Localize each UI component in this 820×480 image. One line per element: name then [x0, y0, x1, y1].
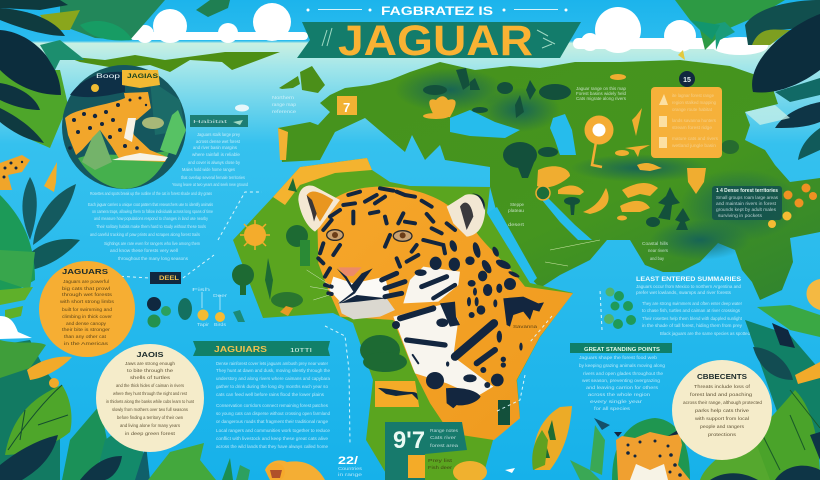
small orange deer [280, 306, 293, 316]
orange info card: region stalked mapping [672, 100, 716, 105]
teal tag: Habitat [193, 119, 229, 124]
cream circle panel: and the thick hides of caiman in rivers [116, 383, 185, 388]
title small heading [306, 4, 568, 18]
bird icon [235, 104, 249, 112]
asia text block: Forest basins widely held [576, 91, 626, 96]
mid left text block: throughout the many long seasons [118, 256, 189, 261]
bottom panel 9/7 [385, 422, 467, 480]
diet icons [147, 287, 245, 328]
left leaves [0, 177, 80, 320]
mid left text block: Sightings are rare even for rangers who live among them [104, 241, 200, 246]
middle east text: desert [508, 222, 525, 227]
ribbon text block: conflict with livestock and keep these great cats alive [216, 436, 328, 441]
europe badge [337, 96, 357, 115]
ribbon text block [216, 361, 330, 449]
dark asia callout: Small groups roam large areas [716, 195, 779, 200]
small map text: reference [272, 109, 297, 114]
small fish [594, 418, 610, 430]
middle ocean text block: and leaving carrion for others [586, 385, 659, 390]
deel tag [150, 272, 181, 284]
bottom right foliage [700, 305, 820, 480]
bottom left foliage [0, 340, 250, 480]
jaguar stripes [318, 188, 495, 363]
orange circle panel: through wet forests [62, 292, 113, 297]
circular scene: jaguar: JAGIAS [127, 74, 158, 80]
right ear rim [472, 193, 485, 210]
cream circle panel: to bite through the [127, 368, 174, 373]
orange info card: 15 [683, 77, 691, 84]
orange circle panel [39, 261, 135, 357]
cream circle panel: in thickets along the banks while cubs learn to hunt [106, 399, 195, 404]
indian ocean text block [636, 277, 750, 336]
india text: and bay [650, 256, 665, 261]
mid left text block: and measure how populations respond to changes in land use nearby [94, 216, 209, 221]
diet icons: Tapir [197, 322, 210, 327]
small left jaguar [0, 155, 30, 190]
top left foliage [0, 0, 165, 143]
ribbon text block: gather to drink during the long dry months each year so [216, 384, 328, 389]
central asia trees [423, 68, 571, 178]
indian ocean text block: LEAST ENTERED SUMMARIES [636, 277, 741, 283]
circular scene: jaguar: Boop [96, 74, 121, 80]
green below muzzle [413, 370, 450, 433]
dark asia callout: and maintain rivers in forest [716, 201, 777, 206]
ribbon text block: Conservation corridors connect remaining forest patches [216, 403, 329, 408]
cream circle right: Threats include loss of [694, 384, 751, 389]
top left text block: Young leave at two years and seek new ground [172, 182, 248, 187]
middle ocean text block: wet season, preventing overgrazing [582, 378, 660, 383]
left small cloud [0, 316, 32, 339]
top left text block: where rainfall is reliable [192, 152, 240, 157]
top left text block: that overlap several female territories [181, 175, 246, 180]
mid left text block: Rosettes and spots break up the outline of the cat in forest shade and dry grass [90, 191, 213, 196]
title small heading: FAGBRATEZ IS [381, 4, 493, 18]
dotted route lines [115, 192, 602, 445]
middle ocean text block: every single year [590, 399, 643, 404]
orange circle panel: and dense canopy [66, 321, 107, 326]
top left text block: Jaguars stalk large prey [197, 132, 241, 137]
left ear shadow [307, 195, 317, 222]
cream circle panel: slowly from mothers over two full seasons [112, 407, 189, 412]
title ribbon: JAGUAR [338, 17, 533, 65]
orange fruits [768, 184, 817, 228]
whiskers [307, 270, 330, 300]
left cloud [130, 3, 308, 43]
africa yellow coast [273, 158, 372, 205]
land: europe and asia [278, 60, 820, 300]
bottom panel 9/7: Fish deer [428, 465, 453, 470]
deel tag: DEEL [159, 276, 179, 282]
bottom orange bear [265, 460, 325, 480]
africa bottom yellow [453, 461, 487, 480]
white muzzle [329, 277, 390, 308]
sun icon [240, 220, 270, 250]
middle ribbon: GREAT STANDING POINTS [584, 347, 660, 353]
golden map icons [423, 74, 706, 220]
top right foliage [675, 0, 820, 160]
orange circle panel: JAGUARS [62, 269, 108, 276]
small map text: Northern [272, 95, 295, 100]
jaguar fur [317, 187, 573, 440]
left ear inner [307, 191, 333, 222]
indian ocean text block: prefer wet lowlands, swamps and river forests [636, 290, 732, 295]
cream circle right: protections [708, 432, 737, 437]
orange fish [27, 357, 72, 380]
middle east text: Steppe [510, 202, 524, 207]
orange circle panel: built for swimming and [62, 307, 113, 312]
jaguar head and body [298, 185, 573, 440]
orange info card [651, 71, 722, 158]
orange info card: mature cats and rivers [672, 136, 719, 141]
small map text: range map [272, 102, 296, 107]
right cloud [573, 7, 768, 55]
ribbon text block: or dangerous roads that fragment their traditional range [216, 419, 328, 424]
india text: near rivers [648, 248, 669, 253]
cream circle right: with support from local [695, 416, 749, 421]
portrait green backdrop [612, 418, 690, 480]
top left text block: and cover is always close by [188, 160, 241, 165]
indian ocean text block: They are strong swimmers and often enter deep water [642, 301, 742, 306]
scene jaguar [65, 92, 167, 162]
asia text block [576, 86, 627, 101]
middle ocean text block: across the whole region [588, 392, 651, 397]
asia text block: Jaguar range on this map [576, 86, 626, 91]
top left text block: Males hold wide home ranges [182, 167, 236, 172]
top left text block: across dense wet forest [196, 139, 241, 144]
small map text [272, 95, 297, 114]
cream circle panel: shells of turtles [130, 375, 171, 380]
bottom panel 9/7: forest area [430, 443, 459, 448]
top left text block [172, 132, 248, 187]
diet icons: Birds [214, 322, 227, 327]
dark asia callout: 1 4 Dense forest territories [716, 188, 778, 194]
cream circle right: forest land and poaching [690, 392, 753, 397]
jaguar markings [337, 239, 544, 408]
middle east text: plateau [508, 208, 524, 213]
small orange bird [49, 378, 59, 388]
orange bird right [795, 362, 820, 384]
africa land [233, 158, 573, 480]
indian ocean text block: in the shade of tall forest, hiding them from prey [642, 323, 743, 328]
ribbon text block: across the wild lands that they have always called home [216, 444, 328, 449]
dark asia callout: surviving in pockets [718, 213, 763, 218]
asia text block: Cats migrate along rivers [576, 96, 627, 101]
east africa label: Savanna [513, 324, 538, 329]
lizard panel [375, 381, 420, 407]
indian ocean text block: Black jaguars are the same species as spotted [660, 331, 750, 336]
dark asia callout: grounds kept by adult males [716, 207, 777, 212]
white chest [393, 303, 493, 397]
circular scene: jaguar [62, 65, 186, 189]
orange circle panel: than any other cat [64, 334, 107, 339]
middle east text [508, 202, 525, 227]
ribbon text block: Dense rainforest cover lets jaguars ambush prey near water [216, 361, 328, 366]
asia shading [395, 68, 800, 260]
orange circle panel: in the Americas [64, 341, 109, 346]
right orange disc [806, 279, 820, 310]
middle ocean text block [579, 355, 665, 411]
title ribbon [297, 17, 581, 65]
portrait side leaves [570, 425, 605, 480]
orange circle panel: climbing in thick cover [62, 314, 113, 319]
mid left text block: and careful tracking of paw prints and scrapes along forest trails [90, 232, 201, 237]
cream circle panel: where they hunt through the night and rest [113, 391, 188, 396]
jaguars ribbon: 10TTI [290, 348, 313, 354]
orange info card: lands savanna hunters [672, 118, 717, 123]
pupils [332, 232, 406, 238]
location pin [584, 116, 614, 167]
ribbon text block: understory and along rivers where caimans and capybara [216, 376, 330, 381]
asia dark trees [564, 140, 739, 230]
madagascar [532, 406, 572, 470]
right ear [447, 194, 485, 237]
cream circle panel: before finding a territory of their own [117, 415, 184, 420]
mid left text block: Each jaguar carries a unique coat pattern that researchers use to identify animals [88, 202, 214, 207]
middle ribbon [570, 343, 672, 353]
top left text block: and river basin margins [193, 145, 238, 150]
bottom panel 9/7: Prey list [428, 458, 453, 463]
indian ocean text block: Jaguars occur from Mexico to northern Argentina and [636, 284, 741, 289]
mid left text block [88, 191, 214, 261]
cream circle panel: and living alone for many years [120, 423, 181, 428]
india text [642, 241, 669, 261]
indian ocean text block: to chase fish, turtles and caiman at river crossings [642, 308, 741, 313]
right sea inlet pale [745, 105, 790, 125]
orange circle panel: Jaguars are powerful [63, 279, 109, 284]
left ear [298, 185, 340, 232]
indian ocean text block: Their rosettes help them blend with dappled sunlight [642, 316, 743, 321]
cream circle right: across their range, although protected [683, 400, 763, 405]
mid left text block: on camera traps, allowing them to follow individuals across long spans of time [92, 209, 213, 214]
bottom panel 9/7: Range notes [430, 428, 459, 433]
diet icons: Fish [192, 287, 211, 292]
orange circle panel: big cats that prowl [62, 286, 110, 291]
cream circle panel: Jaws are strong enough [125, 361, 176, 366]
white cheek [403, 267, 460, 303]
orange info card: wetland jungle basin [672, 143, 716, 148]
inland seas [450, 110, 592, 285]
cream circle panel: in deep green forest [125, 431, 176, 436]
middle ocean text block: for all species [594, 406, 631, 411]
yellow fish [44, 162, 57, 192]
middle ocean text block: rivers and open glades throughout the [583, 371, 663, 376]
nose [338, 267, 362, 276]
left lime wash [0, 70, 68, 148]
india text: Coastal hills [642, 241, 669, 246]
number 22: Countries [338, 466, 363, 471]
eyes [327, 230, 412, 241]
forest block under head [498, 400, 510, 425]
cream circle right: parks help cats thrive [695, 408, 750, 413]
jaguars ribbon [193, 341, 330, 356]
middle ocean text block: Jaguars shape the forest food web [579, 355, 657, 360]
dark asia callout [712, 186, 782, 220]
teal tag [190, 115, 248, 127]
africa forest [232, 178, 407, 372]
right ear shadow [460, 203, 473, 230]
cream circle panel [96, 344, 204, 452]
cream circle right: CBBECENTS [697, 372, 747, 381]
number 22: 22/ [338, 455, 358, 467]
diet icons: Deer [213, 293, 228, 298]
ribbon text block: cats can feed well before rains flood the lower plains [216, 392, 325, 397]
cream circle right: people and rangers [700, 424, 745, 429]
number 22: in range [338, 472, 363, 477]
northern land strip [64, 52, 280, 72]
orange info card: orange route habitat [672, 107, 713, 112]
cream circle right [672, 360, 772, 460]
top island [196, 0, 230, 17]
bottom panel 9/7: Cats river [430, 435, 457, 440]
ribbon text block: Local rangers and communities work together to reduce [216, 428, 330, 433]
europe badge: 7 [343, 100, 350, 115]
number 22 [338, 455, 363, 477]
cream circle panel: JAOIS [136, 350, 164, 359]
orange info card: stream forest ridge [672, 125, 712, 130]
chin [338, 297, 395, 319]
bottom panel 9/7: 9'7 [393, 427, 425, 454]
arabia line [545, 240, 600, 266]
british isles [279, 66, 325, 93]
mid left text block: Their solitary habits make them hard to study without these tools [96, 224, 207, 229]
spain highlight [278, 128, 288, 160]
ribbon text block: so young cats can disperse without crossing open farmland [216, 411, 330, 416]
small right bird [678, 50, 685, 60]
floating bird [505, 468, 515, 473]
ribbon text block: They hunt at dawn and dusk, moving silently through the [216, 368, 330, 373]
jaguars ribbon: JAGUIARS [214, 345, 268, 354]
middle ocean text block: by keeping grazing animals moving along [579, 363, 665, 368]
orange circle panel: their bite is stronger [62, 327, 111, 332]
orange info card: ite lagnar forest range [672, 93, 714, 98]
jaguar head portrait [614, 430, 690, 480]
mid left text block: and know these forests very well [110, 248, 178, 253]
tree icon [604, 288, 636, 329]
orange circle panel: with short strong limbs [60, 299, 115, 304]
